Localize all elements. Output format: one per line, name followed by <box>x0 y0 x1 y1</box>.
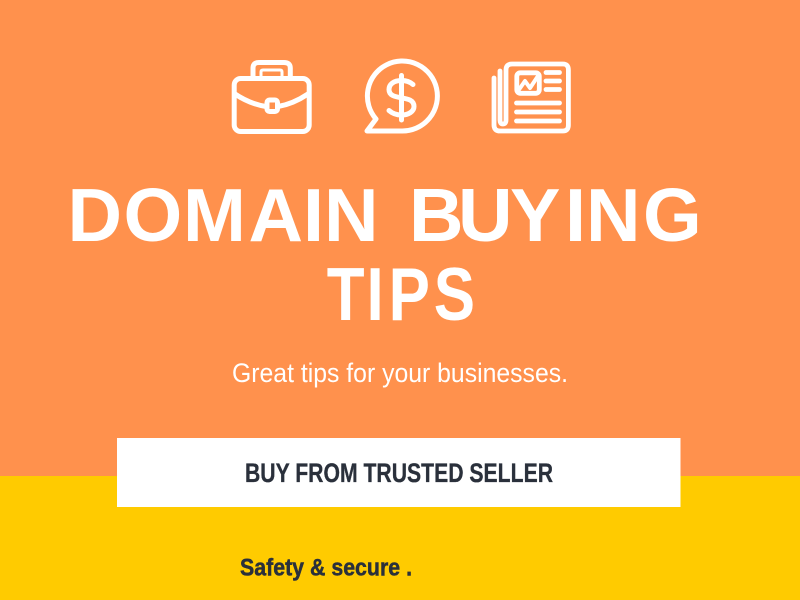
icon: newspaper <box>494 64 568 131</box>
subtitle: Great tips for your businesses. <box>232 358 568 388</box>
icon: briefcase <box>234 62 309 132</box>
panel: orange background <box>0 0 800 476</box>
title <box>0 173 702 336</box>
panel: yellow background <box>0 476 800 600</box>
text block: safety note: Safety & secure . <box>240 554 412 582</box>
title: DOMAIN BUYING <box>0 173 702 257</box>
icon: dollar speech bubble <box>367 61 437 131</box>
banner text: BUY FROM TRUSTED SELLER <box>245 458 553 488</box>
title: TIPS <box>327 251 475 336</box>
callout: white banner <box>117 438 680 507</box>
